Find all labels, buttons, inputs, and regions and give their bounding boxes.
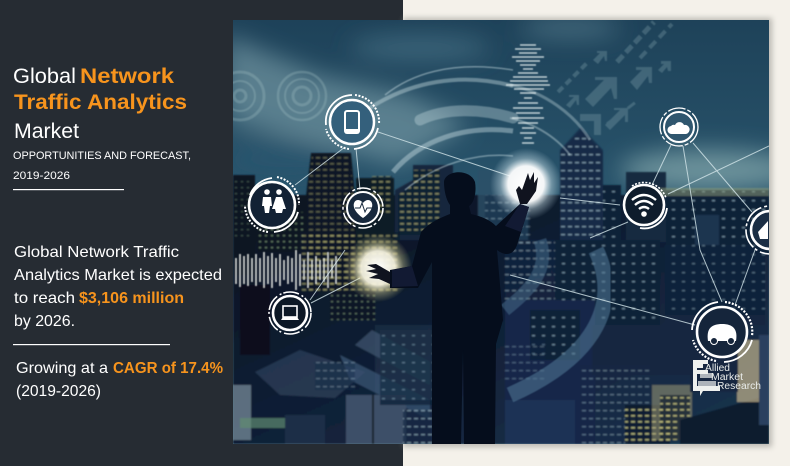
market size text: to reach	[14, 290, 75, 307]
bright hand glow upper	[490, 148, 562, 220]
market size text: by 2026.	[14, 313, 75, 330]
subheading	[13, 150, 191, 182]
logo: Allied Market Research: Research	[717, 381, 761, 392]
CAGR text: (2019-2026)	[16, 383, 101, 400]
city scene	[233, 127, 769, 444]
arrows in sky	[558, 22, 672, 135]
logo: Allied Market Research: Market	[711, 372, 743, 383]
market size text: $3,106 million	[79, 290, 184, 307]
icon: cloud	[660, 108, 698, 146]
waveform horizontal left	[236, 250, 336, 290]
lit district mid-left	[300, 232, 400, 292]
subheading: OPPORTUNITIES AND FORECAST,	[13, 150, 191, 162]
heading: Network	[80, 64, 174, 88]
icon: house	[745, 205, 769, 255]
light right background	[403, 0, 790, 466]
lower right buildings	[505, 240, 555, 300]
CAGR text: Growing at a	[16, 360, 108, 377]
dark left background	[0, 0, 403, 466]
signal arcs	[370, 67, 590, 190]
heading: Global	[13, 64, 76, 88]
clouds	[220, 19, 790, 190]
hands	[366, 172, 538, 284]
bright hand glow lower	[344, 234, 412, 302]
heading	[13, 64, 187, 143]
icon: car	[692, 302, 752, 362]
man silhouette	[390, 172, 529, 444]
heading: Traffic Analytics	[14, 90, 187, 114]
ground	[233, 195, 769, 444]
market size text	[14, 244, 222, 330]
logo: Allied Market Research	[693, 360, 761, 396]
icon: wifi	[624, 182, 667, 228]
photo shadow	[403, 18, 772, 447]
icon: heart	[343, 188, 383, 228]
market size text: Analytics Market is expected	[14, 267, 222, 284]
icon: phone	[326, 95, 379, 149]
heading: Market	[14, 119, 79, 143]
icon: people	[245, 177, 299, 232]
CAGR text: CAGR of 17.4%	[113, 360, 223, 377]
logo: Allied Market Research: Allied	[705, 363, 730, 374]
connection lines	[295, 132, 769, 325]
vertical waveform above raised hand	[506, 45, 550, 143]
subheading: 2019-2026	[13, 170, 70, 182]
large ground ring	[505, 240, 605, 395]
skyscrapers	[233, 174, 256, 196]
panel: city photo illustration	[216, 19, 790, 444]
lower left blocks	[233, 385, 251, 440]
CAGR text	[16, 360, 223, 400]
market size text: Global Network Traffic	[14, 244, 179, 261]
sky rings left	[216, 72, 326, 120]
icon: laptop	[269, 292, 311, 334]
